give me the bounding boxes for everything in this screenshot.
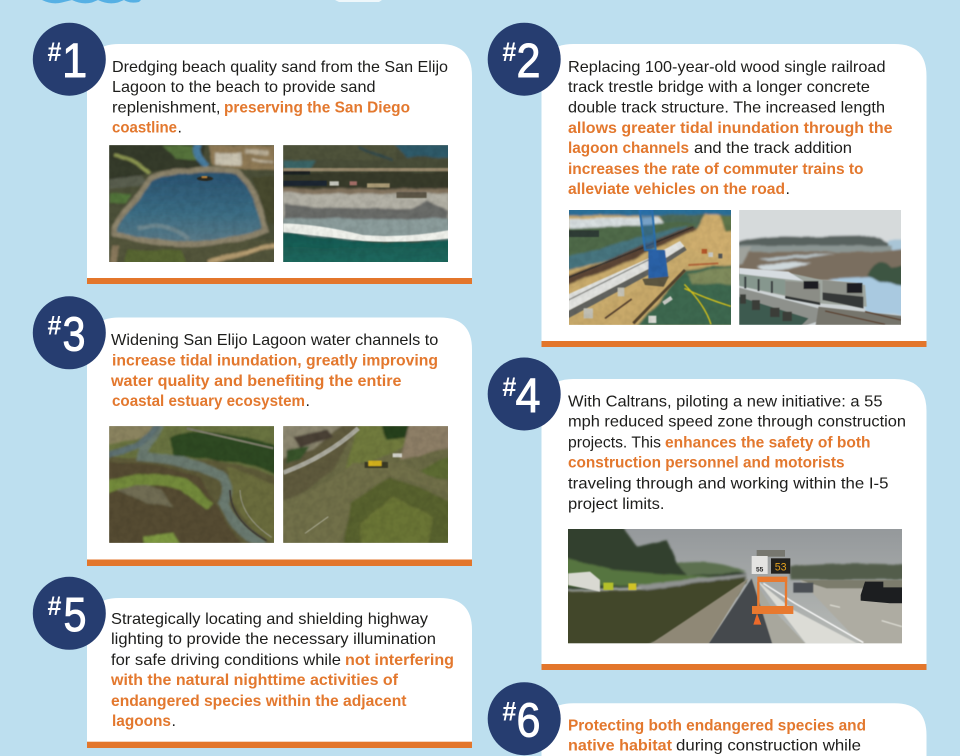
number badge #5: 5 [64, 589, 86, 642]
text block: enhances the safety of both [665, 435, 870, 452]
text block: coastline [112, 120, 177, 136]
text block: project limits. [568, 496, 664, 513]
cropped white title fragment at top edge [335, 0, 382, 2]
text block: With Caltrans, piloting a new initiative: a 55 [568, 394, 883, 411]
text block: Lagoon to the beach to provide sand [112, 79, 376, 96]
photo: speed sign trailer on I-5: 55 [756, 566, 764, 573]
panel: item 1 dredging [33, 23, 472, 284]
number badge #1: # [48, 37, 62, 67]
orange bar [542, 341, 926, 347]
text block: with the natural nighttime activities of [110, 672, 399, 689]
text block: Strategically locating and shielding highway [111, 611, 428, 628]
text block: Widening San Elijo Lagoon water channels to [111, 332, 438, 349]
text block: increase tidal inundation, greatly improving [112, 352, 438, 369]
text block: coastal estuary ecosystem [112, 393, 305, 410]
text block: . [172, 713, 176, 730]
text block: Dredging beach quality sand from the San Elijo [112, 59, 448, 76]
text block: not interfering [345, 652, 454, 669]
text block [110, 611, 454, 730]
card background [87, 318, 472, 566]
text block: native habitat [568, 738, 673, 755]
text block [568, 718, 866, 755]
text block: . [306, 393, 310, 410]
number badge #5 [33, 577, 106, 650]
text block: lagoon channels [568, 140, 689, 157]
number badge #3: 3 [62, 309, 86, 362]
orange bar [87, 278, 472, 284]
photo: bridge construction with crane [569, 210, 731, 325]
orange bar [87, 742, 472, 748]
card background [542, 703, 926, 756]
orange bar [542, 664, 926, 670]
text block: lagoons [112, 713, 171, 730]
number badge #1: 1 [62, 35, 87, 88]
orange bar [87, 560, 472, 566]
text block [568, 394, 906, 513]
number badge #2: 2 [516, 35, 540, 88]
text block: preserving the San Diego [224, 100, 410, 116]
text block: for safe driving conditions while [111, 652, 341, 669]
number badge #6: 6 [516, 694, 540, 748]
card background [542, 44, 926, 347]
photo: beach replenishment [283, 145, 448, 262]
card background [87, 598, 472, 748]
text block: replenishment, [112, 100, 220, 116]
panel: item 2 railroad bridge [488, 23, 926, 347]
text block: during construction while [676, 738, 861, 755]
text block [568, 59, 893, 198]
number badge #2: # [502, 37, 516, 67]
number badge #6: # [502, 696, 516, 726]
photo: passenger train on bridge [739, 210, 901, 325]
card background [542, 379, 926, 670]
photo: speed sign trailer on I-5 [568, 529, 902, 644]
text block: water quality and benefiting the entire [110, 373, 402, 390]
text block: construction personnel and motorists [568, 455, 845, 472]
number badge #3 [33, 296, 106, 369]
text block: mph reduced speed zone through construction [568, 414, 906, 431]
text block: alleviate vehicles on the road [568, 181, 785, 198]
number badge #4: # [502, 372, 516, 402]
cropped logo at top edge [42, 0, 141, 3]
text block [110, 332, 438, 410]
text block: projects. This [568, 435, 661, 452]
text block: allows greater tidal inundation through the [568, 120, 893, 137]
number badge #1 [33, 23, 106, 96]
text block: traveling through and working within the I-5 [568, 476, 889, 493]
text block: Protecting both endangered species and [568, 718, 866, 735]
number badge #4 [488, 358, 561, 430]
number badge #5: # [48, 591, 62, 621]
text block: track trestle bridge with a longer concrete [568, 79, 870, 96]
text block: lighting to provide the necessary illumination [111, 631, 436, 648]
panel: item 4 reduced speed zone [488, 358, 926, 670]
text block: double track structure. The increased length [568, 100, 885, 116]
text block: increases the rate of commuter trains to [568, 161, 864, 178]
photo: dredge in lagoon channel [283, 426, 448, 543]
text block [112, 59, 448, 136]
text block: . [178, 120, 182, 136]
panel: item 6 protecting species [488, 682, 926, 756]
card background [87, 44, 472, 284]
text block: . [786, 181, 790, 198]
panel: item 5 highway lighting [33, 577, 472, 748]
panel: item 3 widening channels [33, 296, 472, 566]
photo: speed sign trailer on I-5: 53 [775, 562, 787, 574]
photo: widened lagoon channel [109, 426, 274, 543]
number badge #2 [488, 23, 561, 96]
number badge #6 [488, 682, 561, 755]
text block: and the track addition [694, 140, 852, 157]
text block: endangered species within the adjacent [111, 693, 407, 710]
photo: dredged lagoon basin [109, 145, 274, 262]
number badge #4: 4 [516, 370, 540, 423]
number badge #3: # [48, 311, 62, 341]
text block: Replacing 100-year-old wood single railroad [568, 59, 886, 76]
